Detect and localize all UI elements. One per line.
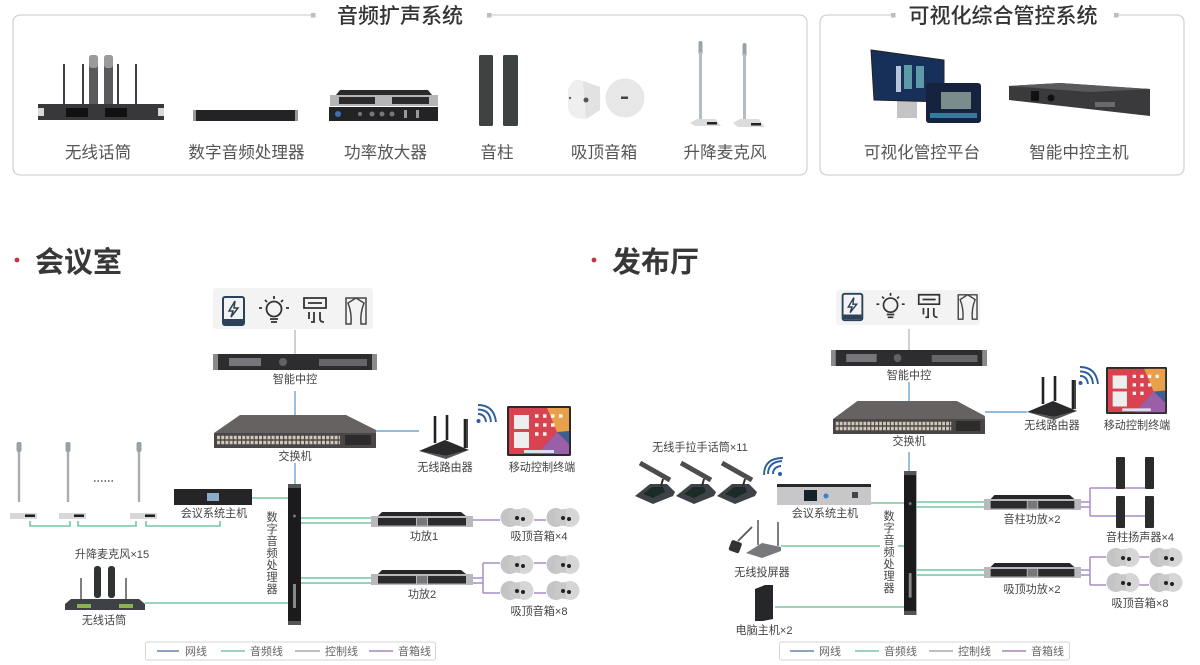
legend: 控制线: [958, 644, 991, 658]
ceiling speaker amplifier: [984, 563, 1081, 596]
wireless router: 无线路由器: [417, 460, 473, 474]
wireless microphone set: 升降麦克风×15: [75, 547, 149, 561]
amplifier 2: [371, 570, 473, 601]
desktop computer host: 电脑主机×2: [735, 623, 793, 637]
connections: network and control: [909, 329, 1027, 471]
wireless casting device: [728, 520, 790, 579]
legend: 音箱线: [398, 644, 431, 658]
legend: 音箱线: [1031, 644, 1064, 658]
panel: audio system: [13, 5, 807, 175]
ceiling speakers x8: 吸顶音箱×8: [1111, 596, 1169, 610]
digital audio processor: 处: [266, 559, 278, 572]
conference system host: [174, 489, 252, 520]
ceiling speaker amplifier: 吸顶功放×2: [1003, 582, 1061, 596]
product: visual control platform: [864, 50, 981, 162]
digital audio processor: 音: [883, 533, 895, 547]
legend: 网线: [819, 644, 841, 658]
heading: audio system: 音频扩声系统: [337, 5, 463, 28]
icon: wifi: [764, 458, 783, 476]
column speaker amplifier: [984, 495, 1081, 526]
legend: [146, 642, 436, 660]
section title: press hall: 发布厅: [612, 246, 699, 279]
product: column speaker: [479, 55, 518, 162]
section title: meeting room: 会议室: [35, 246, 122, 279]
wireless microphone set: [65, 547, 149, 627]
digital audio processor: 字: [883, 521, 895, 535]
wireless router: 无线路由器: [1024, 418, 1080, 432]
product: wireless microphone: [38, 55, 164, 162]
controlled devices icons: [213, 288, 373, 329]
heading: visual control system: 可视化综合管控系统: [908, 5, 1098, 28]
digital audio processor: 频: [266, 546, 278, 560]
product: lifting microphone: 升降麦克风: [684, 143, 767, 162]
ceiling speakers x8: 吸顶音箱×8: [510, 604, 568, 618]
legend: 音频线: [250, 644, 283, 658]
digital audio processor: 数: [883, 510, 895, 523]
connections: speaker lines: [473, 520, 546, 593]
desktop computer host: [735, 585, 793, 637]
product: central controller: [1009, 83, 1150, 162]
wireless router: [1024, 376, 1080, 432]
network switch: [214, 415, 376, 463]
conference system host: [777, 484, 871, 520]
ceiling speakers x8: [1106, 548, 1182, 610]
diagram: meeting room: [10, 288, 580, 660]
legend: 网线: [185, 644, 207, 658]
panel: visual control system: [820, 5, 1184, 175]
digital audio processor: 音: [266, 534, 278, 548]
legend: 音频线: [884, 644, 917, 658]
mobile control terminal: [507, 406, 575, 474]
product: column speaker: 音柱: [480, 143, 514, 162]
ceiling speakers x8: [500, 555, 580, 618]
digital audio processor: [266, 484, 301, 625]
connections: speaker lines: [1081, 488, 1149, 585]
product: lifting microphone: [684, 41, 767, 162]
wireless handheld microphones: 无线手拉手话筒×11: [652, 440, 748, 454]
digital audio processor: [883, 471, 916, 615]
ceiling speakers x4: 吸顶音箱×4: [510, 529, 568, 543]
digital audio processor: 处: [883, 558, 895, 571]
product: digital audio processor: [188, 110, 305, 162]
column speaker amplifier: 音柱功放×2: [1003, 512, 1061, 526]
digital audio processor: 频: [883, 545, 895, 559]
product: central controller: 智能中控主机: [1029, 143, 1129, 162]
product: power amplifier: 功率放大器: [344, 143, 427, 162]
digital audio processor: 器: [266, 583, 278, 596]
product: power amplifier: [329, 90, 438, 162]
amplifier 1: 功放1: [410, 529, 438, 543]
product: ceiling speaker: [568, 78, 644, 162]
digital audio processor: 字: [266, 522, 278, 536]
mobile control terminal: [1104, 367, 1170, 432]
wireless router: [417, 415, 473, 474]
icon: wifi: [476, 405, 496, 423]
conference system host: 会议系统主机: [792, 506, 858, 520]
digital audio processor: 理: [883, 570, 895, 583]
icon: wifi: [1078, 367, 1098, 385]
central controller: [213, 354, 377, 386]
column speakers x4: 音柱扬声器×4: [1106, 530, 1174, 544]
digital audio processor: 数: [266, 511, 278, 524]
product: wireless microphone: 无线话筒: [65, 143, 131, 162]
network switch: 交换机: [892, 434, 926, 448]
central controller: 智能中控: [273, 372, 317, 386]
product: visual control platform: 可视化管控平台: [864, 143, 980, 162]
connections: audio lines: [30, 498, 371, 603]
wireless casting device: 无线投屏器: [734, 565, 790, 579]
network switch: [833, 401, 985, 448]
ceiling speakers x4: [500, 508, 580, 543]
amplifier 1: [371, 512, 473, 543]
central controller: 智能中控: [887, 368, 931, 382]
mobile control terminal: 移动控制终端: [1104, 418, 1170, 432]
conference system host: 会议系统主机: [181, 506, 247, 520]
legend: [780, 642, 1070, 660]
product: digital audio processor: 数字音频处理器: [188, 143, 305, 162]
network switch: 交换机: [278, 449, 312, 463]
wireless microphone set: 无线话筒: [82, 613, 126, 627]
legend: 控制线: [325, 644, 358, 658]
mobile control terminal: 移动控制终端: [509, 460, 575, 474]
column speakers x4: [1106, 457, 1174, 544]
lifting microphones: [10, 442, 157, 519]
connections: audio lines: [775, 502, 984, 607]
digital audio processor: 器: [883, 582, 895, 595]
diagram: press hall: [635, 290, 1182, 660]
central controller: [831, 350, 987, 382]
controlled devices icons: [836, 290, 980, 325]
amplifier 2: 功放2: [408, 587, 436, 601]
wireless handheld microphones: [635, 440, 757, 504]
product: ceiling speaker: 吸顶音箱: [571, 143, 637, 162]
digital audio processor: 理: [266, 571, 278, 584]
connections: network and control: [295, 330, 419, 484]
